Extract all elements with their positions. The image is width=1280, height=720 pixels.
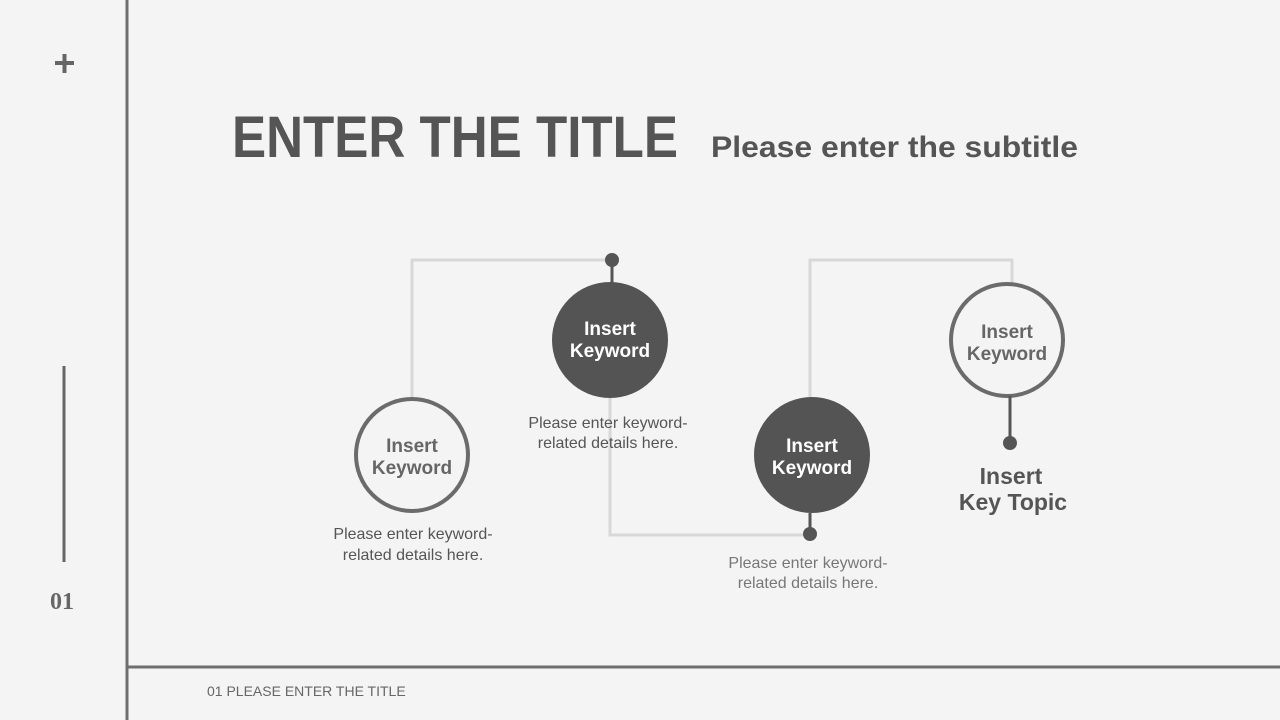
- step 1: related details here.: [343, 547, 483, 564]
- step 4: Insert: [981, 322, 1034, 343]
- icon: plus: [55, 54, 74, 73]
- subtitle: Please enter the subtitle: [711, 131, 1078, 164]
- page number: 01: [50, 589, 74, 615]
- key topic: Insert: [980, 463, 1043, 489]
- step 3: Please enter keyword-: [728, 555, 888, 572]
- connector dots: [605, 253, 817, 541]
- step 2: Please enter keyword-: [528, 415, 688, 432]
- step 4: Keyword: [967, 344, 1047, 365]
- footer text: 01 PLEASE ENTER THE TITLE: [207, 683, 406, 699]
- step 2: related details here.: [538, 435, 678, 452]
- key topic: [959, 463, 1067, 515]
- step 4: [951, 284, 1063, 450]
- step 1: Insert: [386, 436, 439, 457]
- step 1: Please enter keyword-: [333, 526, 493, 543]
- step 3: Insert: [786, 436, 839, 457]
- step 2: [528, 282, 688, 452]
- step 1: Keyword: [372, 458, 452, 479]
- key topic: Key Topic: [959, 489, 1067, 515]
- step 3: related details here.: [738, 575, 878, 592]
- step 3: [728, 397, 888, 592]
- step 2: Keyword: [570, 341, 650, 362]
- step 2: Insert: [584, 319, 637, 340]
- step 1: [333, 399, 493, 564]
- side marker line: [62, 366, 66, 562]
- connectors: [412, 260, 1012, 535]
- title: ENTER THE TITLE: [232, 105, 678, 170]
- step 3: Keyword: [772, 458, 852, 479]
